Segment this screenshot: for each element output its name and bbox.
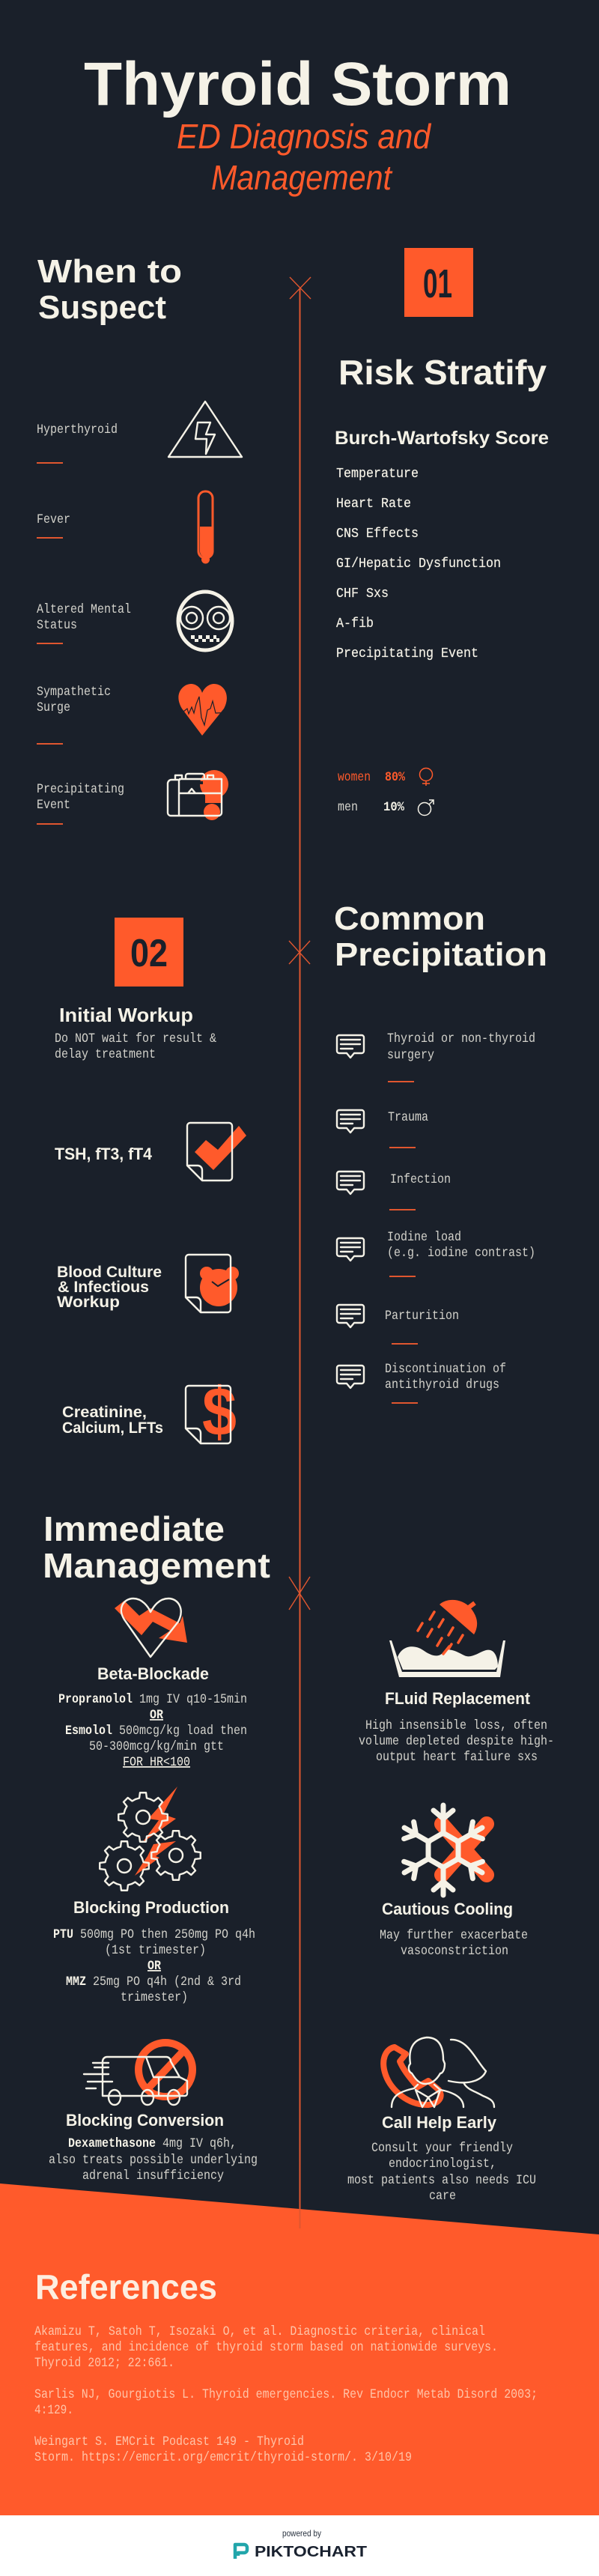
item: blood culture — [57, 1264, 162, 1311]
score criteria list: GI/Hepatic Dysfunction — [336, 556, 501, 572]
item: discontinuation: antithyroid drugs — [385, 1378, 499, 1392]
text: blocking conversion — [49, 2136, 258, 2183]
item: iodine load: Iodine load — [387, 1230, 461, 1245]
heading: immediate management: Immediate — [43, 1509, 225, 1548]
text: call help early: care — [429, 2189, 456, 2204]
subtitle — [177, 117, 431, 197]
score criteria list: Temperature — [336, 466, 419, 482]
heading: blocking production: Blocking Production — [73, 1898, 229, 1917]
text: fluid replacement: High insensible loss, often — [365, 1718, 547, 1733]
note: do not wait — [55, 1031, 216, 1062]
icon: truck with prohibition sign — [84, 2043, 192, 2105]
icon: Piktochart mark — [235, 2545, 247, 2559]
icon: thermometer — [198, 491, 213, 563]
heading: common precipitation: Common — [334, 900, 485, 937]
panel: blocking conversion — [49, 2043, 258, 2183]
text: call help early: most patients also needs ICU — [347, 2173, 536, 2188]
icon: briefcase and question mark — [168, 770, 228, 820]
text: blocking conversion: also treats possible underlying — [49, 2153, 258, 2168]
item: trauma: Trauma — [388, 1110, 428, 1125]
text: call help early: endocrinologist, — [389, 2157, 496, 2172]
heading: when to suspect: When to — [37, 253, 182, 290]
text: reference list: Akamizu T, Satoh T, Isozaki O, et al. Diagnostic criteria, clinical — [34, 2324, 485, 2339]
footer: Piktochart logo: PIKTOCHART — [255, 2544, 367, 2560]
text: blocking production dosing: OR — [148, 1959, 161, 1974]
text: cautious cooling: vasoconstriction — [401, 1944, 508, 1959]
item: blood culture: Workup — [57, 1294, 120, 1311]
icon: document with clock — [186, 1255, 239, 1312]
item: creatinine, calcium, LFTs: Calcium, LFTs — [62, 1419, 163, 1437]
panel: initial workup — [55, 918, 246, 1450]
item: fever: Fever — [37, 512, 70, 527]
heading: common precipitation — [334, 900, 547, 973]
item: iodine load: (e.g. iodine contrast) — [387, 1246, 535, 1261]
text: call help early: Consult your friendly — [371, 2141, 513, 2156]
score criteria list: A-fib — [336, 616, 374, 631]
icon: shower over basin — [389, 1600, 505, 1677]
heading: blocking conversion: Blocking Conversion — [66, 2111, 224, 2130]
text: reference list: Thyroid 2012; 22:661. — [34, 2356, 174, 2371]
item: parturition: Parturition — [385, 1309, 459, 1324]
text: fluid replacement — [359, 1718, 554, 1765]
score criteria list: Precipitating Event — [336, 646, 478, 661]
text: beta-blockade dosing: OR — [150, 1708, 163, 1723]
central divider line with cross marks — [289, 277, 311, 2228]
text: blocking production dosing: 25mg PO q4h (2nd & 3rd — [93, 1975, 241, 1989]
note: do not wait: delay treatment — [55, 1047, 156, 1062]
panel: call help early — [347, 2037, 536, 2204]
background: references panel — [0, 2183, 599, 2576]
item: surgery: surgery — [387, 1048, 434, 1063]
icon: document with dollar — [186, 1374, 237, 1450]
stat: men 10% — [338, 800, 434, 815]
heading: immediate management: Management — [43, 1546, 270, 1585]
icon: heart with down arrow — [115, 1598, 187, 1657]
stat: women 80%: 80% — [385, 770, 405, 785]
heading: when to suspect — [37, 253, 182, 326]
number badge 02: 02 — [130, 932, 168, 975]
text: beta-blockade dosing: 500mcg/kg load then — [119, 1724, 247, 1739]
text: blocking production dosing: MMZ — [66, 1975, 86, 1989]
item: hyperthyroid: Hyperthyroid — [37, 422, 118, 437]
text: beta-blockade dosing: 1mg IV q10-15min — [139, 1692, 247, 1707]
item: fever — [37, 512, 70, 539]
note: do not wait: Do NOT wait for result & — [55, 1031, 216, 1046]
item: altered mental status — [37, 602, 131, 644]
heading: initial workup: Initial Workup — [59, 1004, 193, 1026]
stat: women 80% — [338, 769, 433, 786]
text: cautious cooling — [380, 1928, 528, 1959]
text: blocking production dosing: PTU — [53, 1927, 73, 1942]
text: blocking conversion: Dexamethasone — [68, 2136, 156, 2151]
heading: immediate management — [43, 1509, 270, 1585]
text: beta-blockade dosing: 50-300mcg/kg/min gtt — [89, 1739, 224, 1754]
icon: dizzy face — [178, 592, 232, 650]
score criteria list: CHF Sxs — [336, 586, 389, 601]
text: beta-blockade dosing — [58, 1692, 247, 1770]
heading: fluid replacement: FLuid Replacement — [385, 1689, 531, 1708]
item: sympathetic surge: Surge — [37, 700, 70, 715]
icon: snowflake with cross — [400, 1805, 487, 1895]
item: sympathetic surge: Sympathetic — [37, 685, 111, 700]
text: beta-blockade dosing: Esmolol — [65, 1724, 112, 1739]
item: surgery: Thyroid or non-thyroid — [387, 1031, 535, 1046]
panel: risk stratify — [335, 248, 549, 815]
panel: common precipitation — [334, 900, 547, 1404]
subtitle: Management — [211, 158, 393, 197]
item: precipitating event: Event — [37, 798, 70, 813]
heading: risk stratify: Risk Stratify — [338, 353, 547, 392]
panel: blocking production — [53, 1786, 255, 2005]
item: blood culture: Blood Culture — [57, 1264, 162, 1281]
heading: common precipitation: Precipitation — [335, 936, 547, 973]
icon: warning triangle with bolt — [168, 401, 242, 457]
text: blocking conversion: 4mg IV q6h, — [162, 2136, 237, 2151]
item: creatinine, calcium, LFTs: Creatinine, — [62, 1404, 147, 1421]
subheading: Burch-Wartofsky score: Burch-Wartofsky Score — [335, 428, 549, 449]
score criteria list: CNS Effects — [336, 526, 419, 542]
footer: Piktochart logo: powered by — [282, 2528, 321, 2539]
panel: references — [34, 2267, 538, 2465]
item: altered mental status: Status — [37, 618, 77, 633]
icon: gears with lightning — [100, 1786, 201, 1891]
item: surgery — [337, 1031, 535, 1082]
text: blocking production dosing: trimester) — [121, 1990, 188, 2005]
text: blocking conversion: adrenal insufficiency — [82, 2169, 224, 2183]
panel: beta-blockade — [58, 1598, 247, 1770]
stat: men 10%: men — [338, 800, 358, 815]
icon: document with dollar: $ — [202, 1374, 237, 1450]
subtitle: ED Diagnosis and — [177, 117, 431, 156]
item: hyperthyroid — [37, 422, 118, 464]
text: call help early — [347, 2141, 536, 2204]
heading: references: References — [35, 2267, 217, 2306]
heading: beta-blockade: Beta-Blockade — [97, 1664, 209, 1683]
text: fluid replacement: output heart failure sxs — [376, 1750, 538, 1765]
number badge 02 — [115, 918, 183, 987]
panel: cautious cooling — [380, 1805, 528, 1959]
icon: document with check — [187, 1123, 246, 1181]
heading: when to suspect: Suspect — [38, 289, 166, 326]
item: TSH: TSH, fT3, fT4 — [55, 1145, 153, 1163]
text: reference list — [34, 2324, 538, 2465]
panel: when to suspect — [37, 253, 242, 825]
text: reference list: Storm. https://emcrit.org/emcrit/thyroid-storm/. 3/10/19 — [34, 2450, 412, 2465]
stat: men 10%: 10% — [383, 800, 404, 815]
heading: call help early: Call Help Early — [382, 2113, 497, 2132]
panel: fluid replacement — [359, 1600, 554, 1765]
item: iodine load — [337, 1230, 535, 1277]
item: sympathetic surge — [37, 685, 111, 745]
text: beta-blockade dosing: FOR HR<100 — [123, 1755, 190, 1770]
footer: Piktochart logo — [235, 2528, 367, 2560]
stat: women 80%: women — [338, 770, 371, 785]
item: infection — [337, 1172, 451, 1210]
text: reference list: features, and incidence of thyroid storm based on nationwide surveys. — [34, 2340, 498, 2355]
heading: cautious cooling: Cautious Cooling — [382, 1900, 513, 1918]
item: precipitating event: Precipitating — [37, 782, 124, 797]
icon: heart with ECG — [178, 684, 232, 736]
text: fluid replacement: volume depleted despite high- — [359, 1734, 554, 1749]
text: beta-blockade dosing: Propranolol — [58, 1692, 133, 1707]
item: infection: Infection — [390, 1172, 451, 1187]
text: reference list: 4:129. — [34, 2403, 73, 2418]
item: altered mental status: Altered Mental — [37, 602, 131, 617]
score criteria list — [336, 466, 501, 661]
number badge 01: 01 — [423, 261, 452, 306]
icon: phone and people — [383, 2037, 494, 2107]
text: cautious cooling: May further exacerbate — [380, 1928, 528, 1943]
item: precipitating event — [37, 782, 124, 825]
item: discontinuation — [337, 1362, 506, 1404]
title: Thyroid Storm — [84, 50, 511, 118]
item: creatinine, calcium, LFTs — [62, 1404, 163, 1437]
number badge 01 — [404, 248, 473, 317]
item: trauma — [337, 1110, 428, 1148]
item: discontinuation: Discontinuation of — [385, 1362, 506, 1377]
text: blocking production dosing: (1st trimester) — [105, 1943, 206, 1958]
item: blood culture: & Infectious — [58, 1279, 149, 1296]
text: blocking production dosing: 500mg PO then 250mg PO q4h — [80, 1927, 255, 1942]
score criteria list: Heart Rate — [336, 496, 411, 512]
item: parturition — [337, 1305, 459, 1345]
text: blocking production dosing — [53, 1927, 255, 2005]
text: reference list: Weingart S. EMCrit Podcast 149 - Thyroid — [34, 2434, 304, 2449]
